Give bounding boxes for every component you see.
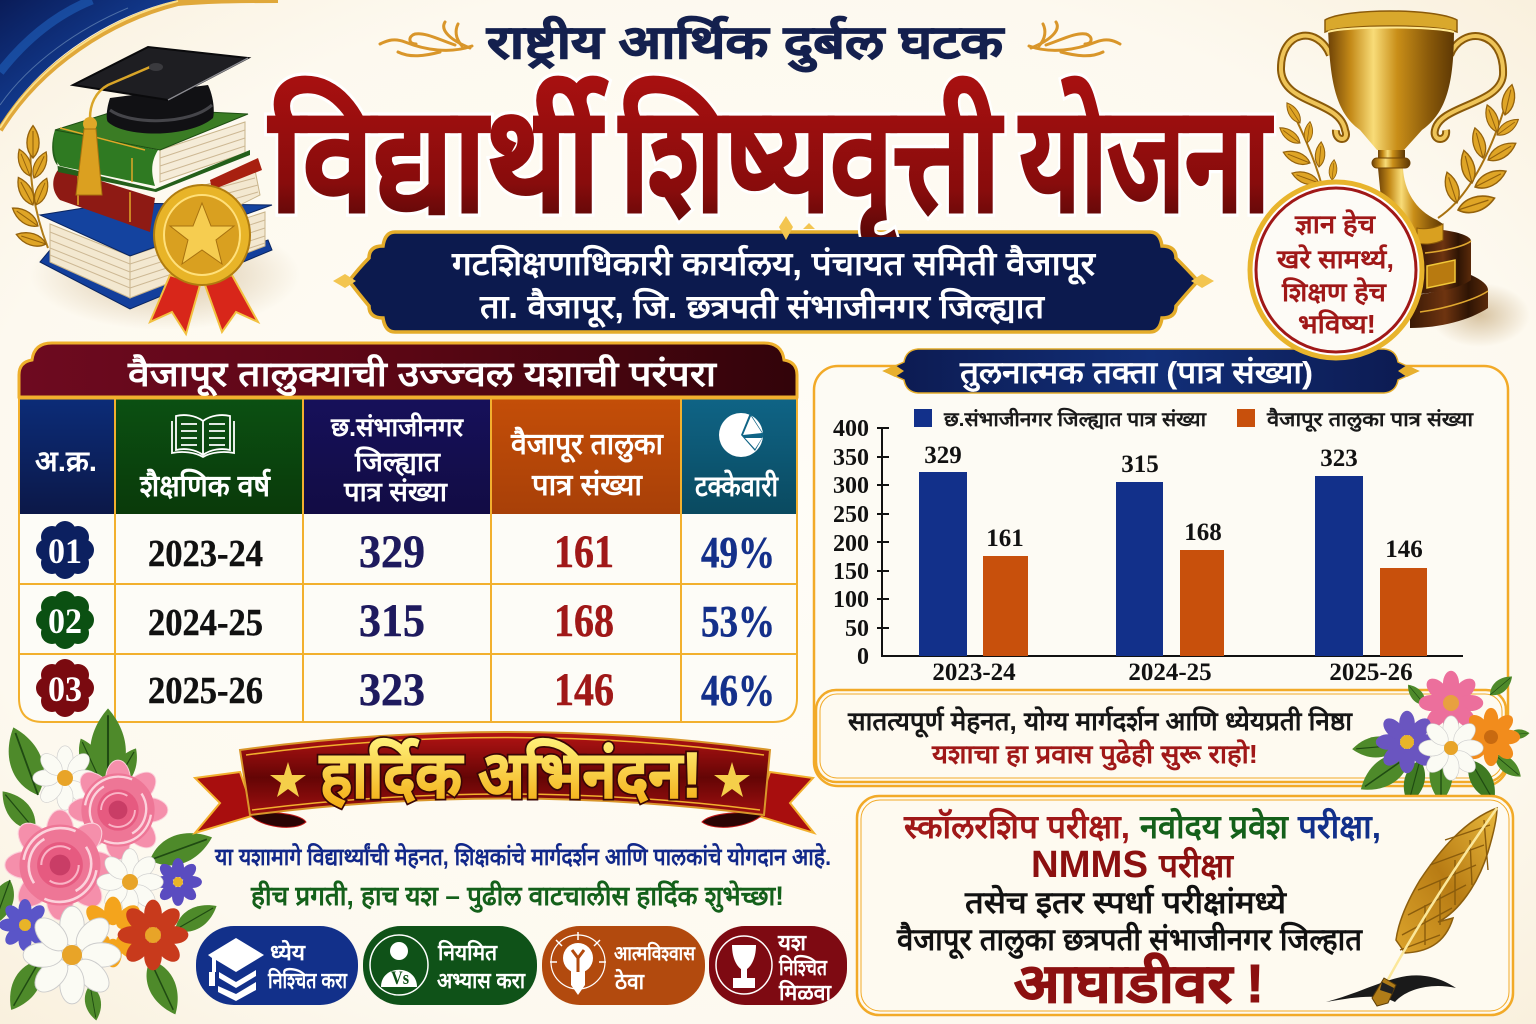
header: percentage xyxy=(682,398,796,514)
icon: student versus xyxy=(370,935,428,995)
bar chart: 2025-26 xyxy=(1329,659,1413,686)
red book xyxy=(53,158,262,232)
pill: regular study xyxy=(363,926,537,1005)
pill: set goal xyxy=(196,926,358,1005)
panel: exam achievement: परीक्षा, xyxy=(1297,807,1381,845)
medal xyxy=(150,185,258,334)
seal: quote badge: ज्ञान हेच xyxy=(1294,209,1377,239)
main title xyxy=(267,76,1274,252)
icon: cup xyxy=(716,936,772,994)
panel: exam achievement: नवोदय प्रवेश xyxy=(1139,807,1290,845)
bar chart: 2024-25 xyxy=(1128,659,1212,686)
cup rim xyxy=(1325,11,1457,32)
table title bar: वैजापूर तालुक्याची उज्ज्वल यशाची परंपरा xyxy=(127,354,718,397)
table title bar xyxy=(19,343,797,397)
bouquet: left flowers xyxy=(0,708,222,1022)
bar chart: 323 xyxy=(1320,445,1358,472)
row 2: 315 xyxy=(359,595,425,647)
bar chart: 146 xyxy=(1385,536,1423,563)
cup xyxy=(1328,28,1454,150)
bar chart: 315 xyxy=(1121,451,1159,478)
panel: exam achievement: ! xyxy=(1246,954,1264,1014)
panel: exam achievement: वैजापूर तालुका छत्रपती संभाजीनगर जिल्हात xyxy=(896,921,1363,960)
row 1: 329 xyxy=(359,526,425,578)
chart title banner xyxy=(883,349,1419,393)
trophy xyxy=(1277,11,1530,347)
panel: comparison chart xyxy=(814,349,1508,786)
badge 02 xyxy=(36,591,94,649)
panel: exam achievement xyxy=(857,796,1513,1015)
pill: keep confidence: ठेवा xyxy=(614,968,645,994)
handles xyxy=(1281,36,1503,139)
main title: योजना xyxy=(1018,76,1274,241)
icon: student versus: Vs xyxy=(391,968,409,989)
panel: exam achievement: आघाडीवर xyxy=(1014,952,1234,1014)
legend: वैजापूर तालुका पात्र संख्या xyxy=(1266,407,1474,432)
graduation cap xyxy=(73,47,248,195)
pill: achieve success xyxy=(709,926,847,1005)
location line: ता. वैजापूर, जि. छत्रपती संभाजीनगर जिल्ह्यात xyxy=(479,287,1045,328)
header: district count: छ.संभाजीनगर xyxy=(330,412,464,442)
ribbon: congratulations: हार्दिक अभिनंदन! xyxy=(319,738,702,811)
bar chart: 161 xyxy=(986,525,1024,552)
bar chart: 200 xyxy=(833,531,869,557)
ribbon: congratulations xyxy=(195,732,814,833)
header: taluka count: वैजापूर तालुका xyxy=(510,426,664,463)
seal: quote badge xyxy=(1250,182,1422,358)
pill: regular study: नियमित xyxy=(437,939,498,965)
soft shadow xyxy=(30,220,300,330)
row 2: 53% xyxy=(701,597,775,646)
row 1: 2023-24 xyxy=(148,533,263,575)
laurel right xyxy=(1438,83,1521,218)
stars xyxy=(270,762,306,797)
badge 01: 01 xyxy=(48,531,82,571)
seal: quote badge: शिक्षण हेच xyxy=(1281,277,1388,307)
row 1 xyxy=(36,521,775,579)
bar chart: 329 xyxy=(924,442,962,469)
badge 03: 03 xyxy=(48,669,82,709)
office name: गटशिक्षणाधिकारी कार्यालय, पंचायत समिती वैजापूर xyxy=(451,244,1097,285)
bar chart: 0 xyxy=(857,644,869,670)
main title: शिष्यवृत्ती xyxy=(618,76,1004,252)
ornament: right flourish xyxy=(1029,22,1120,56)
icon: bulb xyxy=(550,932,606,995)
seal: quote badge: भविष्य! xyxy=(1298,309,1376,339)
header: percentage: टक्केवारी xyxy=(694,469,779,503)
pill: regular study: अभ्यास करा xyxy=(437,968,526,993)
bar chart: 100 xyxy=(833,587,869,613)
row 3: 323 xyxy=(359,664,425,716)
header: district count xyxy=(304,398,490,514)
callout: perseverance message: सातत्यपूर्ण मेहनत, योग्य मार्गदर्शन आणि ध्येयप्रती निष्ठा xyxy=(847,706,1353,738)
green book xyxy=(52,108,250,192)
header: academic year xyxy=(116,398,302,514)
icon: graduation cap xyxy=(208,938,264,1001)
row 3: 146 xyxy=(554,664,614,716)
row 2: 2024-25 xyxy=(148,602,263,644)
header: district count: पात्र संख्या xyxy=(343,477,448,507)
panel: exam achievement: तसेच इतर स्पर्धा परीक्षांमध्ये xyxy=(964,884,1287,920)
bar chart xyxy=(833,416,1463,686)
text: acknowledgement line: या यशामागे विद्यार्थ्यांची मेहनत, शिक्षकांचे मार्गदर्शन आणि पालकांचे योगदान आहे. xyxy=(214,843,831,871)
callout: perseverance message xyxy=(816,690,1506,782)
bar chart: 168 xyxy=(1184,519,1222,546)
row 1: 161 xyxy=(554,526,614,578)
icon: golden quill xyxy=(1326,808,1497,1006)
pill: keep confidence: आत्मविश्वास xyxy=(614,941,696,965)
bar chart: 400 xyxy=(833,416,869,442)
panel: exam achievement: स्कॉलरशिप परीक्षा, xyxy=(903,807,1130,845)
pill: keep confidence xyxy=(542,926,705,1005)
row 3: 2025-26 xyxy=(148,670,263,712)
pill: set goal: निश्चित करा xyxy=(267,967,348,993)
corner swoosh xyxy=(0,0,278,130)
header banner xyxy=(333,216,1214,332)
bar chart: 2023-24 xyxy=(932,659,1016,686)
bar chart: 50 xyxy=(845,616,869,642)
pill: set goal: ध्येय xyxy=(270,939,306,965)
base xyxy=(1410,230,1488,328)
header: serial: अ.क्र. xyxy=(35,446,97,478)
row 2: 168 xyxy=(554,595,614,647)
seal: quote badge: खरे सामर्थ्य, xyxy=(1276,244,1394,274)
row 2 xyxy=(36,591,775,649)
blue book xyxy=(40,203,272,309)
ornament: left flourish xyxy=(380,22,472,56)
subtitle heading: राष्ट्रीय आर्थिक दुर्बल घटक xyxy=(486,16,1005,72)
main title: विद्यार्थी xyxy=(267,76,608,241)
header: district count: जिल्ह्यात xyxy=(354,446,442,477)
header: academic year: शैक्षणिक वर्ष xyxy=(139,468,272,503)
row 3: 46% xyxy=(701,666,775,715)
legend: छ.संभाजीनगर जिल्ह्यात पात्र संख्या xyxy=(943,407,1207,431)
callout: perseverance message: यशाचा हा प्रवास पुढेही सुरू राहो! xyxy=(931,739,1258,771)
ribbon: congratulations: हार्दिक अभिनंदन! xyxy=(319,738,702,811)
icon: open book xyxy=(172,415,234,457)
bar chart: 250 xyxy=(833,502,869,528)
main title: योजना xyxy=(1018,76,1274,241)
row 1: 49% xyxy=(701,528,775,577)
base shadow xyxy=(1430,283,1530,347)
pill: achieve success: मिळवा xyxy=(778,979,832,1005)
panel: exam achievement: NMMS xyxy=(1031,844,1148,886)
header: taluka count xyxy=(492,398,680,514)
main title: विद्यार्थी xyxy=(267,76,608,241)
badge 03 xyxy=(36,659,94,717)
table body xyxy=(19,397,797,722)
pill: achieve success: निश्चित xyxy=(778,954,828,980)
bar chart: 150 xyxy=(833,559,869,585)
header: serial xyxy=(20,398,114,514)
stem xyxy=(1372,150,1443,244)
panel: exam achievement: परीक्षा xyxy=(1158,846,1234,884)
icon: pie chart xyxy=(719,413,764,457)
legend xyxy=(914,407,1474,432)
pill: achieve success: यश xyxy=(777,930,807,955)
table grid xyxy=(19,397,797,722)
text: wishes line: हीच प्रगती, हाच यश – पुढील वाटचालीस हार्दिक शुभेच्छा! xyxy=(250,880,784,913)
panel: results table xyxy=(19,343,797,722)
badge 01 xyxy=(36,521,94,579)
laurel branch xyxy=(9,126,52,250)
chart title banner: तुलनात्मक तक्ता (पात्र संख्या) xyxy=(959,355,1313,392)
row 3 xyxy=(36,659,775,717)
bar chart: 300 xyxy=(833,473,869,499)
illustration: books, cap and medal xyxy=(9,47,300,334)
badge 02: 02 xyxy=(48,601,82,641)
header: taluka count: पात्र संख्या xyxy=(531,469,643,502)
laurel left xyxy=(1277,100,1338,188)
main title: शिष्यवृत्ती xyxy=(618,76,1004,252)
bar chart: 350 xyxy=(833,445,869,471)
bouquet: right flowers xyxy=(1351,671,1530,807)
